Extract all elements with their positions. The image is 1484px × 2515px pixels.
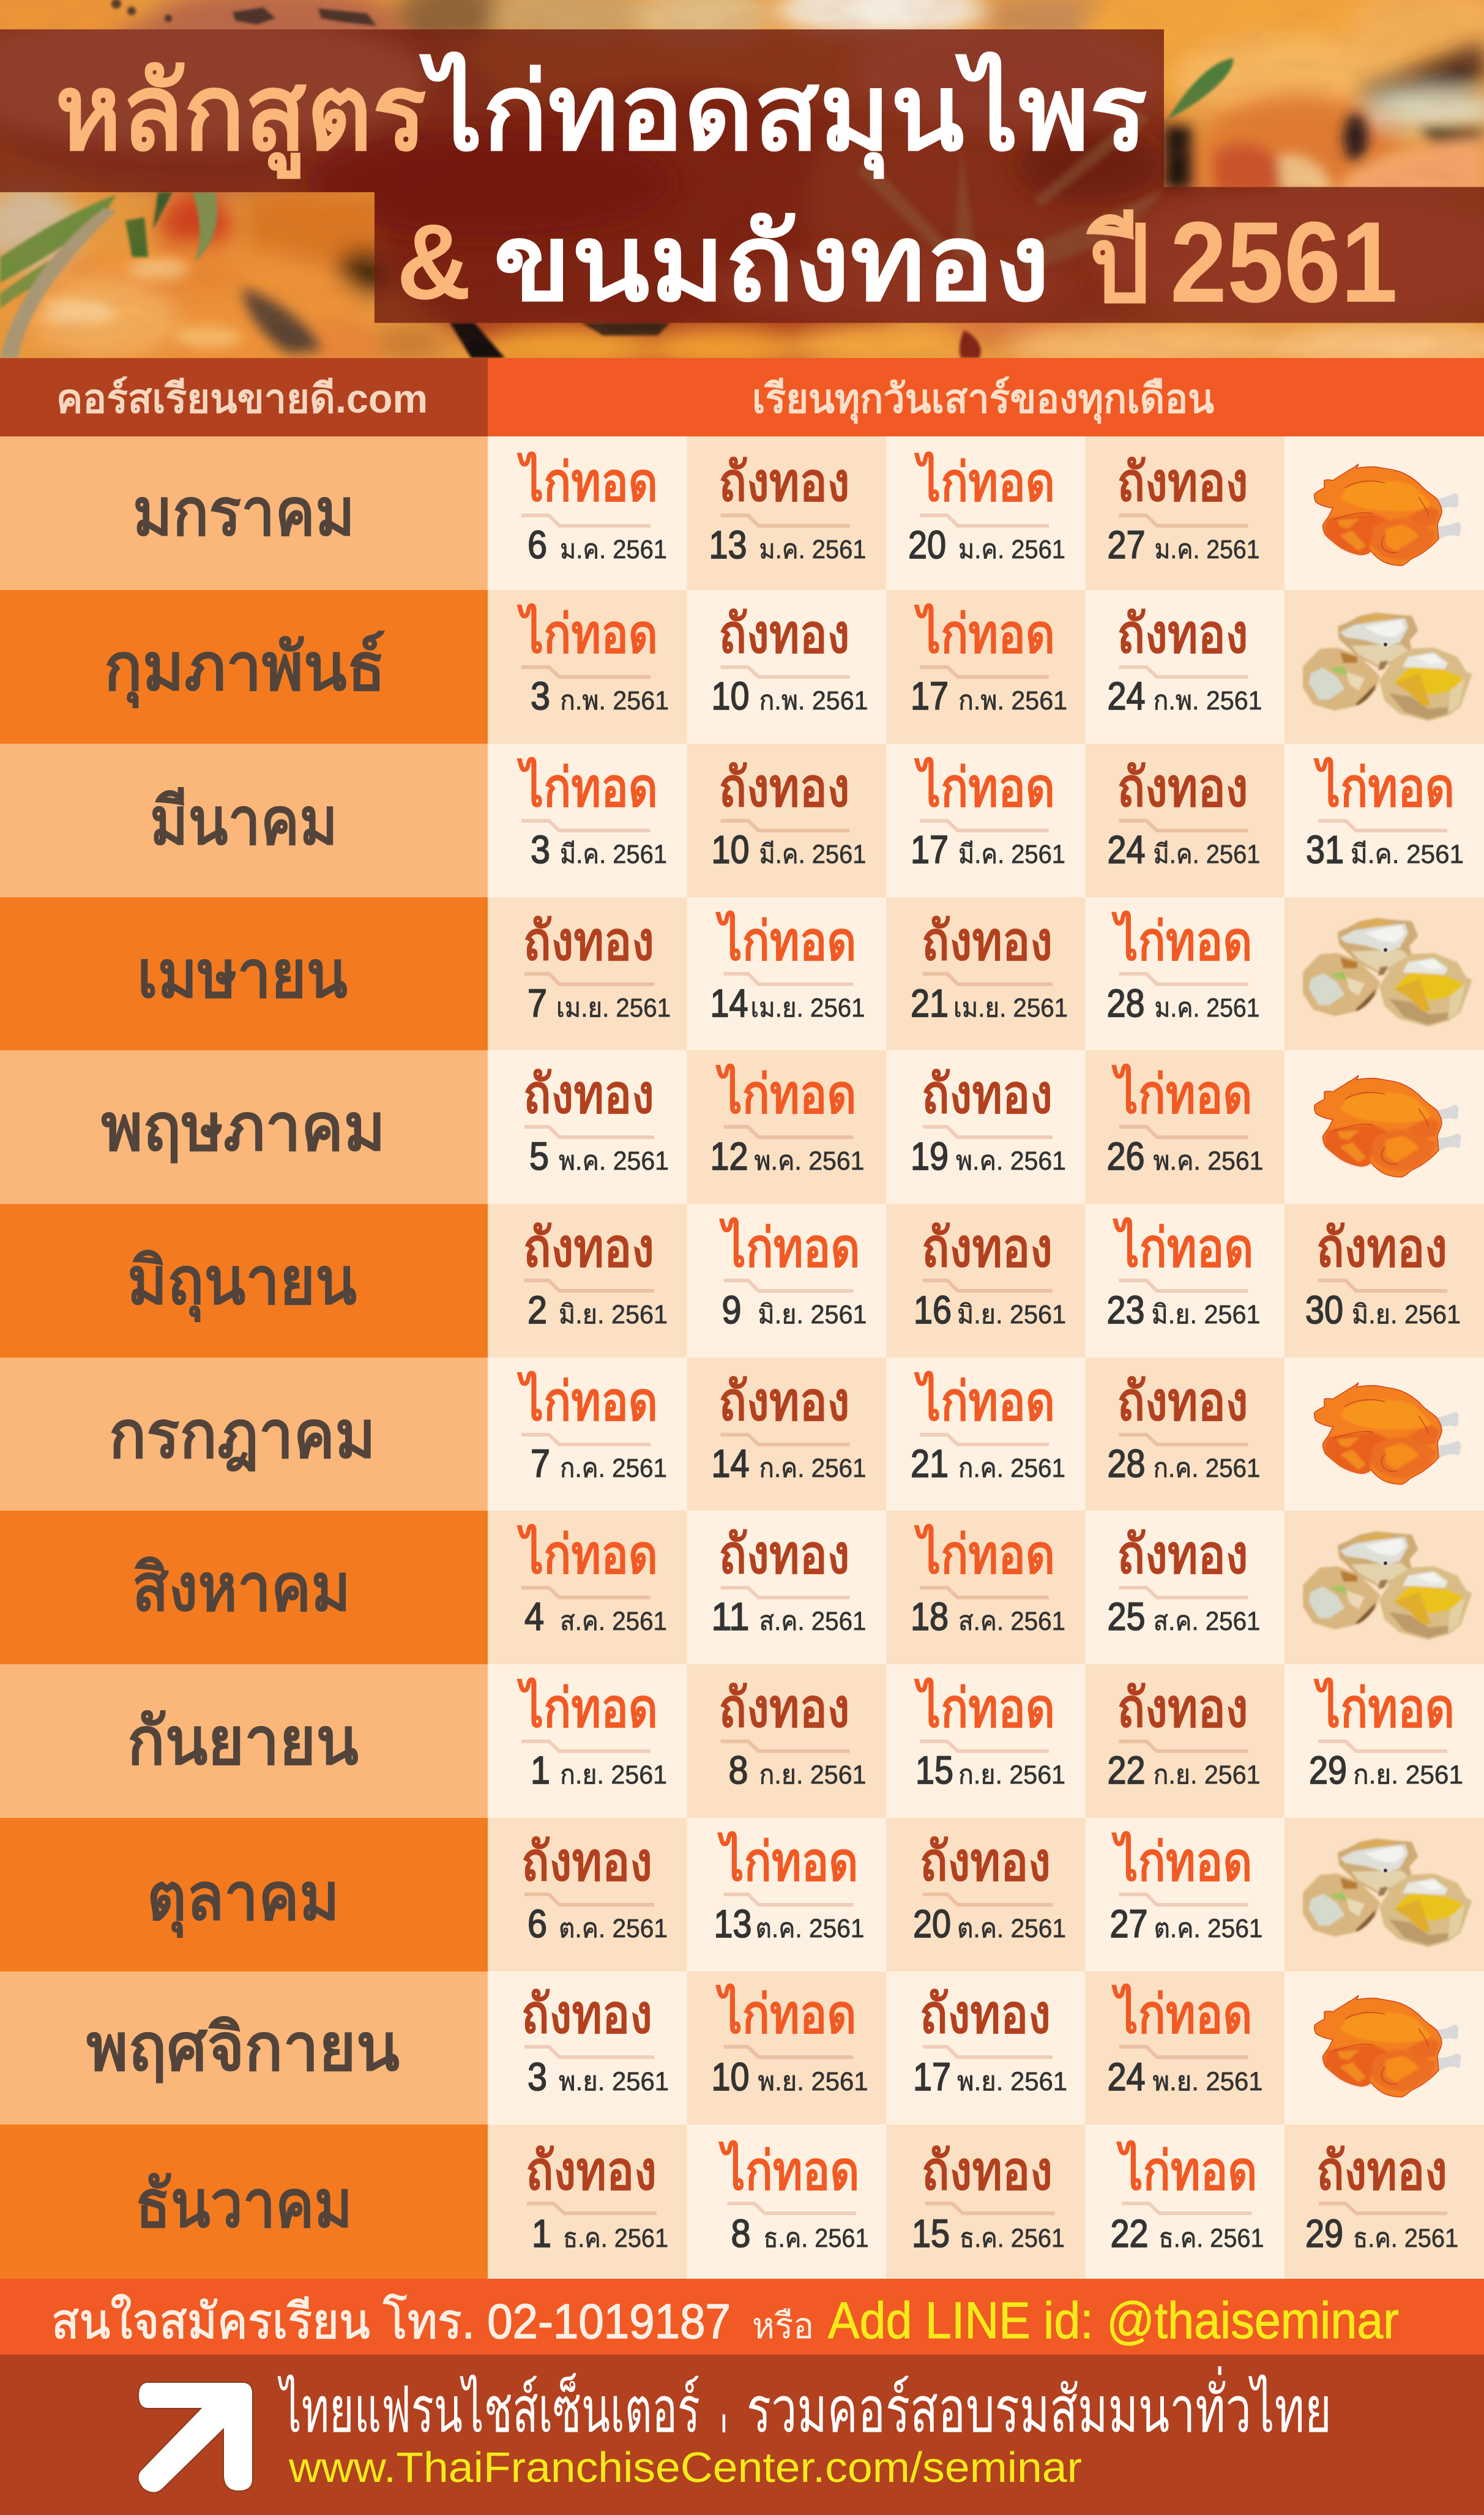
cell: ไก่ทอด 10 พ.ย.: [687, 1971, 886, 2124]
month: พฤศจิกายน: พฤศจิกายน: [86, 2010, 400, 2084]
contact bar: สนใจสมัครเรียน โทร. 02-1019187: [51, 2293, 731, 2349]
cell: ไก่ทอด 3 มี.ค.: 3: [531, 828, 550, 872]
cell: ถังทอง 10 ก.พ.: ถังทอง: [718, 604, 849, 664]
cell: ไก่ทอด 9 มิ.ย.: ไก่ทอด: [719, 1217, 860, 1278]
row: กรกฎาคม dates: [488, 1358, 1484, 1511]
cell: ถังทอง 16 มิ.ย.: [886, 1204, 1086, 1358]
cell: ถังทอง 7 เม.ย.: [488, 897, 687, 1050]
row: กันยายน dates: [488, 1664, 1484, 1818]
title banner backgrounds: [0, 12, 1484, 324]
cell: ถังทอง 13 ม.ค.: ถังทอง: [718, 452, 849, 512]
cell: ถังทอง 16 มิ.ย.: ถังทอง: [922, 1217, 1053, 1278]
cell: ถังทอง 24 มี.ค.: 24: [1108, 828, 1146, 872]
month: ตุลาคม: [0, 1818, 488, 1971]
cell: ไก่ทอด 29 ก.ย.: [1285, 1664, 1484, 1818]
cell: ไก่ทอด 3 ก.พ.: 3: [531, 674, 550, 718]
cell: ถังทอง 24 มี.ค.: มี.ค. 2561: [1153, 840, 1261, 869]
cell: chicken icon: [1285, 1971, 1484, 2124]
cell: ถังทอง 22 ก.ย.: 22: [1108, 1748, 1146, 1792]
cell: ถังทอง 14 ก.ค.: ถังทอง: [718, 1371, 849, 1432]
cell: ไก่ทอด 8 ธ.ค.: ธ.ค. 2561: [764, 2224, 869, 2253]
cell: khanom icon: [1285, 590, 1484, 744]
title line 1: [55, 51, 1147, 179]
contact bar: [0, 2279, 1484, 2355]
month: กุมภาพันธ์: [0, 590, 488, 744]
cell: ถังทอง 13 ม.ค.: ม.ค. 2561: [759, 535, 867, 564]
cell: ไก่ทอด 31 มี.ค.: 31: [1306, 828, 1344, 872]
cell: ไก่ทอด 17 มี.ค.: มี.ค. 2561: [958, 840, 1065, 869]
cell: chicken icon: [1285, 1050, 1484, 1204]
cell: ไก่ทอด 26 พ.ค.: พ.ค. 2561: [1153, 1146, 1263, 1176]
footer organization text: ไทยแฟรนไชส์เซ็นเตอร์: [277, 2372, 700, 2446]
cell: ถังทอง 1 ธ.ค.: 1: [532, 2211, 551, 2255]
cell: ถังทอง 11 ส.ค.: [687, 1511, 886, 1664]
cell: ถังทอง 20 ต.ค.: 20: [913, 1902, 951, 1946]
cell: ถังทอง 5 พ.ค.: 5: [529, 1134, 549, 1178]
cell: ถังทอง 28 ก.ค.: 28: [1108, 1441, 1146, 1485]
cell: ถังทอง 22 ก.ย.: ถังทอง: [1117, 1678, 1248, 1738]
cell: ถังทอง 27 ม.ค.: ม.ค. 2561: [1154, 535, 1259, 564]
cell: ถังทอง 20 ต.ค.: ต.ค. 2561: [957, 1914, 1066, 1943]
cell: ไก่ทอด 6 ม.ค.: ม.ค. 2561: [560, 535, 667, 564]
cell: ไก่ทอด 1 ก.ย.: 1: [531, 1748, 550, 1792]
cell: ไก่ทอด 23 มิ.ย.: มิ.ย. 2561: [1152, 1300, 1261, 1329]
cell: ถังทอง 15 ธ.ค.: ถังทอง: [922, 2140, 1053, 2201]
cell: ไก่ทอด 3 มี.ค.: มี.ค. 2561: [560, 840, 667, 869]
cell: ไก่ทอด 23 มิ.ย.: [1086, 1204, 1285, 1358]
cell: ไก่ทอด 4 ส.ค.: 4: [524, 1594, 544, 1639]
header bar right: เรียนทุกวันเสาร์ของทุกเดือน: [752, 376, 1214, 424]
month: มีนาคม: มีนาคม: [150, 784, 338, 858]
title line 2: &: [397, 203, 471, 322]
cell: ถังทอง 10 ก.พ.: 10: [711, 674, 749, 718]
cell: ถังทอง 3 พ.ย.: 3: [528, 2055, 547, 2099]
cell: ไก่ทอด 9 มิ.ย.: [687, 1204, 886, 1358]
cell: ถังทอง 1 ธ.ค.: ถังทอง: [526, 2140, 657, 2201]
cell: ไก่ทอด 18 ส.ค.: [886, 1511, 1086, 1664]
cell: ไก่ทอด 6 ม.ค.: [488, 436, 687, 590]
month: กันยายน: กันยายน: [127, 1704, 359, 1778]
cell: ไก่ทอด 31 มี.ค.: มี.ค. 2561: [1351, 840, 1464, 869]
cell: ไก่ทอด 22 ธ.ค.: ธ.ค. 2561: [1159, 2224, 1264, 2253]
contact bar: Add LINE id: @thaiseminar: [828, 2292, 1399, 2349]
cell: ไก่ทอด 1 ก.ย.: ก.ย. 2561: [560, 1760, 667, 1790]
cell: ไก่ทอด 21 ก.ค.: ก.ค. 2561: [958, 1454, 1065, 1483]
cell: ไก่ทอด 14 เม.ย.: [687, 897, 886, 1050]
month: มีนาคม: [0, 744, 488, 897]
cell: ถังทอง 25 ส.ค.: ถังทอง: [1117, 1524, 1248, 1585]
cell: ถังทอง 21 เม.ย.: ถังทอง: [922, 911, 1053, 971]
row: เมษายน dates: [488, 897, 1484, 1050]
cell: ถังทอง 6 ต.ค.: ถังทอง: [521, 1831, 652, 1892]
cell: ถังทอง 15 ธ.ค.: [886, 2124, 1086, 2279]
month: สิงหาคม: [0, 1511, 488, 1664]
cell: ถังทอง 8 ก.ย.: ก.ย. 2561: [759, 1760, 867, 1790]
cell: ถังทอง 17 พ.ย.: 17: [913, 2055, 951, 2099]
cell: chicken icon: [1285, 436, 1484, 590]
cell: ไก่ทอด 15 ก.ย.: 15: [915, 1748, 953, 1792]
month: มกราคม: มกราคม: [133, 475, 355, 549]
cell: ถังทอง 24 ก.พ.: 24: [1108, 674, 1146, 718]
cell: ถังทอง 28 ก.ค.: [1086, 1358, 1285, 1511]
cell: ถังทอง 29 ธ.ค.: [1285, 2124, 1484, 2279]
cell: ถังทอง 13 ม.ค.: 13: [709, 523, 747, 567]
row: มิถุนายน dates: [488, 1204, 1484, 1358]
month: พฤศจิกายน: [0, 1971, 488, 2124]
cell: ถังทอง 24 ก.พ.: ถังทอง: [1117, 604, 1248, 664]
cell: ไก่ทอด 20 ม.ค.: [886, 436, 1086, 590]
cell: ถังทอง 5 พ.ค.: พ.ค. 2561: [559, 1146, 669, 1176]
cell: ถังทอง 22 ก.ย.: [1086, 1664, 1285, 1818]
icon: arrow up-right: [138, 2382, 253, 2493]
hero photo background: fried chicken and herbs: [0, 0, 1484, 379]
cell: ถังทอง 1 ธ.ค.: [488, 2124, 687, 2279]
cell: ไก่ทอด 4 ส.ค.: [488, 1511, 687, 1664]
cell: ไก่ทอด 27 ต.ค.: ต.ค. 2561: [1154, 1914, 1263, 1943]
cell: ถังทอง 29 ธ.ค.: ธ.ค. 2561: [1353, 2224, 1458, 2253]
cell: ถังทอง 1 ธ.ค.: ธ.ค. 2561: [563, 2224, 668, 2253]
cell: ถังทอง 6 ต.ค.: ต.ค. 2561: [559, 1914, 668, 1943]
row: สิงหาคม dates: [488, 1511, 1484, 1664]
cell: ถังทอง 2 มิ.ย.: ถังทอง: [523, 1217, 654, 1278]
cell: ถังทอง 27 ม.ค.: ถังทอง: [1117, 452, 1248, 512]
cell: ถังทอง 5 พ.ค.: [488, 1050, 687, 1204]
cell: ไก่ทอด 3 ก.พ.: ก.พ. 2561: [560, 686, 669, 716]
cell: ไก่ทอด 31 มี.ค.: ไก่ทอด: [1313, 757, 1455, 818]
cell: ไก่ทอด 13 ต.ค.: [687, 1818, 886, 1971]
cell: ไก่ทอด 26 พ.ค.: ไก่ทอด: [1111, 1064, 1252, 1124]
cell: ไก่ทอด 26 พ.ค.: [1086, 1050, 1285, 1204]
footer panel: [0, 2355, 1484, 2515]
cell: ถังทอง 14 ก.ค.: ก.ค. 2561: [759, 1454, 867, 1483]
cell: ถังทอง 27 ม.ค.: 27: [1108, 523, 1146, 567]
cell: ถังทอง 3 พ.ย.: พ.ย. 2561: [559, 2067, 669, 2096]
cell: ไก่ทอด 8 ธ.ค.: [687, 2124, 886, 2279]
cell: ถังทอง 14 ก.ค.: 14: [711, 1441, 749, 1485]
cell: ถังทอง 21 เม.ย.: 21: [911, 981, 949, 1025]
cell: ถังทอง 28 ก.ค.: ก.ค. 2561: [1153, 1454, 1261, 1483]
cell: ไก่ทอด 24 พ.ย.: ไก่ทอด: [1111, 1984, 1252, 2044]
cell: ไก่ทอด 20 ม.ค.: ไก่ทอด: [914, 452, 1055, 512]
cell: ไก่ทอด 6 ม.ค.: 6: [528, 523, 547, 567]
cell: ไก่ทอด 17 ก.พ.: ไก่ทอด: [914, 604, 1055, 664]
cell: ไก่ทอด 17 ก.พ.: [886, 590, 1086, 744]
cell: ไก่ทอด 3 ก.พ.: [488, 590, 687, 744]
cell: ไก่ทอด 27 ต.ค.: ไก่ทอด: [1111, 1831, 1252, 1892]
cell: ไก่ทอด 15 ก.ย.: ก.ย. 2561: [958, 1760, 1065, 1790]
header bar right: [488, 358, 1484, 436]
month: พฤษภาคม: พฤษภาคม: [101, 1090, 386, 1164]
cell: ไก่ทอด 24 พ.ย.: [1086, 1971, 1285, 2124]
cell: ถังทอง 15 ธ.ค.: ธ.ค. 2561: [960, 2224, 1065, 2253]
cell: ไก่ทอด 12 พ.ค.: ไก่ทอด: [715, 1064, 857, 1124]
cell: khanom icon: [1285, 1511, 1484, 1664]
cell: ถังทอง 2 มิ.ย.: มิ.ย. 2561: [559, 1300, 668, 1329]
cell: ไก่ทอด 18 ส.ค.: 18: [911, 1594, 949, 1639]
cell: ถังทอง 10 มี.ค.: 10: [711, 828, 749, 872]
cell: ถังทอง 24 ก.พ.: [1086, 590, 1285, 744]
month: ธันวาคม: [0, 2124, 488, 2279]
cell: ไก่ทอด 28 ม.ค.: ม.ค. 2561: [1154, 993, 1259, 1023]
cell: ถังทอง 6 ต.ค.: [488, 1818, 687, 1971]
cell: ถังทอง 20 ต.ค.: [886, 1818, 1086, 1971]
cell: ไก่ทอด 1 ก.ย.: ไก่ทอด: [516, 1678, 658, 1738]
cell: ถังทอง 28 ก.ค.: ถังทอง: [1117, 1371, 1248, 1432]
footer organization text: |: [721, 2412, 726, 2432]
row: ธันวาคม dates: [488, 2124, 1484, 2279]
cell: ถังทอง 7 เม.ย.: 7: [528, 981, 547, 1025]
cell: ไก่ทอด 18 ส.ค.: ส.ค. 2561: [958, 1607, 1065, 1636]
cell: ไก่ทอด 3 มี.ค.: ไก่ทอด: [516, 757, 658, 818]
cell: ไก่ทอด 22 ธ.ค.: ไก่ทอด: [1116, 2140, 1257, 2201]
month: มิถุนายน: [0, 1204, 488, 1358]
cell: ถังทอง 3 พ.ย.: [488, 1971, 687, 2124]
cell: ไก่ทอด 14 เม.ย.: ไก่ทอด: [715, 911, 857, 971]
cell: ถังทอง 19 พ.ค.: พ.ค. 2561: [956, 1146, 1066, 1176]
cell: ถังทอง 25 ส.ค.: ส.ค. 2561: [1153, 1607, 1261, 1636]
cell: ไก่ทอด 14 เม.ย.: เม.ย. 2561: [750, 993, 865, 1023]
month: กุมภาพันธ์: กุมภาพันธ์: [104, 630, 386, 709]
cell: ถังทอง 8 ก.ย.: [687, 1664, 886, 1818]
cell: ไก่ทอด 24 พ.ย.: 24: [1108, 2055, 1146, 2099]
cell: ถังทอง 16 มิ.ย.: 16: [914, 1288, 952, 1332]
row: กุมภาพันธ์ dates: [488, 590, 1484, 744]
cell: ถังทอง 25 ส.ค.: [1086, 1511, 1285, 1664]
cell: ถังทอง 3 พ.ย.: ถังทอง: [521, 1984, 652, 2044]
cell: ไก่ทอด 7 ก.ค.: ก.ค. 2561: [560, 1454, 667, 1483]
cell: ถังทอง 8 ก.ย.: ถังทอง: [718, 1678, 849, 1738]
cell: ถังทอง 11 ส.ค.: ถังทอง: [718, 1524, 849, 1585]
cell: ไก่ทอด 29 ก.ย.: 29: [1309, 1748, 1347, 1792]
cell: ไก่ทอด 28 ม.ค.: ไก่ทอด: [1111, 911, 1252, 971]
cell: ถังทอง 17 พ.ย.: ถังทอง: [920, 1984, 1051, 2044]
cell: ถังทอง 21 เม.ย.: [886, 897, 1086, 1050]
cell: ไก่ทอด 31 มี.ค.: [1285, 744, 1484, 897]
cell: ไก่ทอด 21 ก.ค.: ไก่ทอด: [914, 1371, 1055, 1432]
cell: ถังทอง 10 ก.พ.: ก.พ. 2561: [759, 686, 868, 716]
cell: ถังทอง 24 มี.ค.: ถังทอง: [1117, 757, 1248, 818]
cell: ไก่ทอด 9 มิ.ย.: 9: [722, 1288, 742, 1332]
title line 1: ไก่ทอดสมุนไพร: [419, 51, 1147, 179]
cell: ถังทอง 19 พ.ค.: ถังทอง: [922, 1064, 1053, 1124]
cell: ถังทอง 5 พ.ค.: ถังทอง: [523, 1064, 654, 1124]
cell: ไก่ทอด 27 ต.ค.: [1086, 1818, 1285, 1971]
cell: ไก่ทอด 28 ม.ค.: [1086, 897, 1285, 1050]
cell: khanom icon: [1285, 1818, 1484, 1971]
cell: ถังทอง 19 พ.ค.: [886, 1050, 1086, 1204]
cell: ไก่ทอด 13 ต.ค.: ไก่ทอด: [717, 1831, 858, 1892]
month: ธันวาคม: ธันวาคม: [135, 2167, 352, 2241]
cell: ถังทอง 30 มิ.ย.: ถังทอง: [1316, 1217, 1447, 1278]
cell: ไก่ทอด 17 มี.ค.: [886, 744, 1086, 897]
footer organization text: [277, 2366, 1332, 2446]
cell: ไก่ทอด 10 พ.ย.: พ.ย. 2561: [758, 2067, 868, 2096]
cell: ไก่ทอด 20 ม.ค.: 20: [908, 523, 946, 567]
cell: ถังทอง 25 ส.ค.: 25: [1108, 1594, 1146, 1639]
month: เมษายน: [0, 897, 488, 1050]
title line 1: หลักสูตร: [55, 53, 427, 179]
cell: ไก่ทอด 20 ม.ค.: ม.ค. 2561: [958, 535, 1065, 564]
row: ตุลาคม dates: [488, 1818, 1484, 1971]
cell: ถังทอง 17 พ.ย.: พ.ย. 2561: [957, 2067, 1067, 2096]
header bar left: [0, 358, 488, 436]
cell: ถังทอง 19 พ.ค.: 19: [911, 1134, 949, 1178]
title line 2: ปี: [1086, 206, 1150, 325]
cell: ไก่ทอด 4 ส.ค.: ส.ค. 2561: [560, 1607, 667, 1636]
cell: ถังทอง 29 ธ.ค.: ถังทอง: [1316, 2140, 1447, 2201]
cell: ถังทอง 10 มี.ค.: ถังทอง: [718, 757, 849, 818]
cell: ไก่ทอด 8 ธ.ค.: ไก่ทอด: [718, 2140, 859, 2201]
cell: ไก่ทอด 12 พ.ค.: พ.ค. 2561: [754, 1146, 864, 1176]
cell: ถังทอง 30 มิ.ย.: มิ.ย. 2561: [1352, 1300, 1461, 1329]
cell: ไก่ทอด 10 พ.ย.: ไก่ทอด: [715, 1984, 857, 2044]
cell: ไก่ทอด 10 พ.ย.: 10: [711, 2055, 749, 2099]
cell: ถังทอง 21 เม.ย.: เม.ย. 2561: [953, 993, 1068, 1023]
cell: ไก่ทอด 17 มี.ค.: 17: [911, 828, 949, 872]
cell: ถังทอง 16 มิ.ย.: มิ.ย. 2561: [957, 1300, 1066, 1329]
cell: ถังทอง 6 ต.ค.: 6: [528, 1902, 547, 1946]
cell: ไก่ทอด 8 ธ.ค.: 8: [731, 2211, 750, 2255]
cell: ถังทอง 29 ธ.ค.: 29: [1305, 2211, 1343, 2255]
cell: ถังทอง 11 ส.ค.: ส.ค. 2561: [759, 1607, 867, 1636]
month: ตุลาคม: ตุลาคม: [147, 1859, 340, 1938]
cell: ไก่ทอด 13 ต.ค.: 13: [714, 1902, 751, 1946]
cell: ไก่ทอด 17 ก.พ.: 17: [911, 674, 949, 718]
title line 2: ขนมถังทอง: [493, 204, 1050, 323]
month: พฤษภาคม: [0, 1050, 488, 1204]
cell: ถังทอง 24 มี.ค.: [1086, 744, 1285, 897]
cell: ถังทอง 20 ต.ค.: ถังทอง: [920, 1831, 1051, 1892]
cell: ไก่ทอด 27 ต.ค.: 27: [1110, 1902, 1148, 1946]
month: มิถุนายน: มิถุนายน: [127, 1244, 357, 1323]
cell: ไก่ทอด 7 ก.ค.: 7: [531, 1441, 550, 1485]
cell: ถังทอง 22 ก.ย.: ก.ย. 2561: [1153, 1760, 1261, 1790]
row: มีนาคม dates: [488, 744, 1484, 897]
cell: ไก่ทอด 7 ก.ค.: ไก่ทอด: [516, 1371, 658, 1432]
row: พฤศจิกายน dates: [488, 1971, 1484, 2124]
month: มกราคม: [0, 436, 488, 590]
cell: ถังทอง 24 ก.พ.: ก.พ. 2561: [1153, 686, 1262, 716]
contact bar: หรือ: [752, 2306, 814, 2346]
cell: ถังทอง 2 มิ.ย.: [488, 1204, 687, 1358]
cell: ไก่ทอด 23 มิ.ย.: 23: [1106, 1288, 1144, 1332]
cell: ไก่ทอด 29 ก.ย.: ไก่ทอด: [1313, 1678, 1455, 1738]
cell: ไก่ทอด 3 มี.ค.: [488, 744, 687, 897]
month: สิงหาคม: สิงหาคม: [132, 1550, 351, 1624]
cell: ไก่ทอด 3 ก.พ.: ไก่ทอด: [516, 604, 658, 664]
cell: ไก่ทอด 26 พ.ค.: 26: [1106, 1134, 1144, 1178]
cell: chicken icon: [1285, 1358, 1484, 1511]
cell: ถังทอง 8 ก.ย.: 8: [728, 1748, 748, 1792]
cell: ไก่ทอด 29 ก.ย.: ก.ย. 2561: [1353, 1760, 1463, 1790]
cell: ไก่ทอด 13 ต.ค.: ต.ค. 2561: [755, 1914, 864, 1943]
cell: ถังทอง 27 ม.ค.: [1086, 436, 1285, 590]
cell: ถังทอง 10 มี.ค.: มี.ค. 2561: [759, 840, 867, 869]
cell: ไก่ทอด 28 ม.ค.: 28: [1106, 981, 1144, 1025]
cell: ไก่ทอด 7 ก.ค.: [488, 1358, 687, 1511]
cell: ไก่ทอด 17 มี.ค.: ไก่ทอด: [914, 757, 1055, 818]
cell: ไก่ทอด 14 เม.ย.: 14: [710, 981, 748, 1025]
cell: ไก่ทอด 23 มิ.ย.: ไก่ทอด: [1113, 1217, 1253, 1278]
title line 2: 2561: [1170, 198, 1398, 326]
title line 2: [397, 198, 1398, 326]
cell: ไก่ทอด 15 ก.ย.: [886, 1664, 1086, 1818]
cell: ไก่ทอด 4 ส.ค.: ไก่ทอด: [516, 1524, 658, 1585]
month: กันยายน: [0, 1664, 488, 1818]
cell: ไก่ทอด 9 มิ.ย.: มิ.ย. 2561: [758, 1300, 867, 1329]
month labels column: [0, 436, 488, 2279]
cell: ถังทอง 30 มิ.ย.: [1285, 1204, 1484, 1358]
cell: ไก่ทอด 6 ม.ค.: ไก่ทอด: [516, 452, 658, 512]
footer website url: www.ThaiFranchiseCenter.com/seminar: [288, 2443, 1082, 2491]
cell: ไก่ทอด 17 ก.พ.: ก.พ. 2561: [958, 686, 1067, 716]
cell: ถังทอง 30 มิ.ย.: 30: [1305, 1288, 1343, 1332]
cell: ถังทอง 10 ก.พ.: [687, 590, 886, 744]
cell: ไก่ทอด 22 ธ.ค.: [1086, 2124, 1285, 2279]
month: กรกฎาคม: [0, 1358, 488, 1511]
cell: ถังทอง 10 มี.ค.: [687, 744, 886, 897]
cell: ไก่ทอด 18 ส.ค.: ไก่ทอด: [914, 1524, 1055, 1585]
cell: ไก่ทอด 24 พ.ย.: พ.ย. 2561: [1153, 2067, 1263, 2096]
header bar left: คอร์สเรียนขายดี.com: [56, 376, 428, 421]
cell: ไก่ทอด 1 ก.ย.: [488, 1664, 687, 1818]
cell: ไก่ทอด 22 ธ.ค.: 22: [1110, 2211, 1148, 2255]
cell: ถังทอง 7 เม.ย.: ถังทอง: [523, 911, 654, 971]
cell: ถังทอง 11 ส.ค.: 11: [711, 1594, 749, 1639]
cell: ถังทอง 13 ม.ค.: [687, 436, 886, 590]
cell: ไก่ทอด 12 พ.ค.: [687, 1050, 886, 1204]
cell: khanom icon: [1285, 897, 1484, 1050]
cell: ถังทอง 14 ก.ค.: [687, 1358, 886, 1511]
month: เมษายน: เมษายน: [137, 937, 348, 1011]
cell: ถังทอง 15 ธ.ค.: 15: [912, 2211, 950, 2255]
month: กรกฎาคม: กรกฎาคม: [109, 1397, 376, 1472]
cell: ไก่ทอด 21 ก.ค.: [886, 1358, 1086, 1511]
row: มกราคม dates: [488, 436, 1484, 590]
cell: ถังทอง 7 เม.ย.: เม.ย. 2561: [556, 993, 671, 1023]
cell: ไก่ทอด 21 ก.ค.: 21: [911, 1441, 949, 1485]
cell: ถังทอง 2 มิ.ย.: 2: [528, 1288, 547, 1332]
row: พฤษภาคม dates: [488, 1050, 1484, 1204]
cell: ไก่ทอด 15 ก.ย.: ไก่ทอด: [914, 1678, 1055, 1738]
cell: ไก่ทอด 12 พ.ค.: 12: [710, 1134, 748, 1178]
cell: ถังทอง 17 พ.ย.: [886, 1971, 1086, 2124]
